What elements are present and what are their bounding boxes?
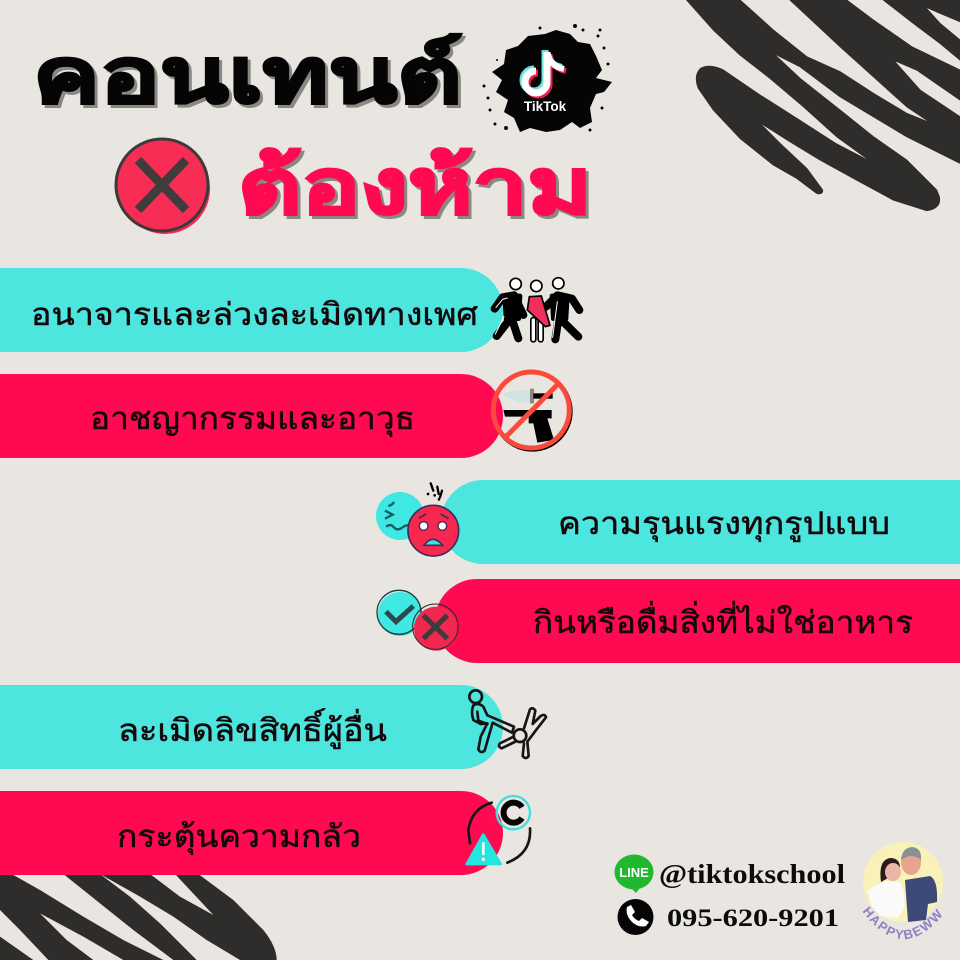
icon: LINE logo: LINE <box>619 865 649 880</box>
panel: sexual content bar <box>0 268 503 352</box>
icon: copyright and warning <box>467 796 530 864</box>
panel: crime and weapons bar: อาชญากรรมและอาวุธ <box>90 401 415 438</box>
panel: copyright bar: ละเมิดลิขสิทธิ์ผู้อื่น <box>118 707 387 749</box>
decoration: zebra strokes bottom left <box>0 874 277 960</box>
badge name: HAPPYBEWW <box>862 906 942 940</box>
panel: eating non-food bar <box>435 579 960 663</box>
contact: phone number: 095-620-9201 <box>667 905 839 932</box>
woman <box>867 858 904 918</box>
icon: check and cross <box>377 590 458 651</box>
contact: LINE handle: @tiktokschool <box>659 859 846 889</box>
icon: red X circle <box>116 139 210 234</box>
panel: fear bar <box>0 791 503 875</box>
panel: crime and weapons bar <box>0 374 503 458</box>
icon: kicking figure <box>469 690 546 758</box>
man <box>901 847 937 922</box>
panel: copyright bar <box>0 685 503 769</box>
title line 1: คอนเทนต์ <box>33 34 462 119</box>
icon: TikTok splatter logo: TikTok <box>524 99 567 114</box>
panel: eating non-food bar: กินหรือดื่มสิ่งที่ไม่ใช่อาหาร <box>533 601 913 640</box>
panel: sexual content bar: อนาจารและล่วงละเมิดทางเพศ <box>31 297 478 332</box>
portrait: HappyBeww badge <box>862 842 943 940</box>
panel: fear bar: กระตุ้นความกลัว <box>117 819 361 856</box>
icon: no weapons <box>493 372 572 451</box>
decoration: zebra strokes top right <box>687 0 960 211</box>
title line 2: ต้องห้าม <box>241 148 595 233</box>
icon: worried faces <box>376 483 459 556</box>
icon: three figures <box>495 278 579 339</box>
title line 1: คอนเทนต์ <box>36 37 465 122</box>
icon: phone <box>618 899 654 935</box>
panel: violence bar <box>441 480 960 564</box>
title line 2: ต้องห้าม <box>238 145 592 230</box>
icon: TikTok splatter logo <box>482 24 612 132</box>
panel: violence bar: ความรุนแรงทุกรูปแบบ <box>558 506 890 543</box>
icon: LINE logo <box>614 854 654 893</box>
